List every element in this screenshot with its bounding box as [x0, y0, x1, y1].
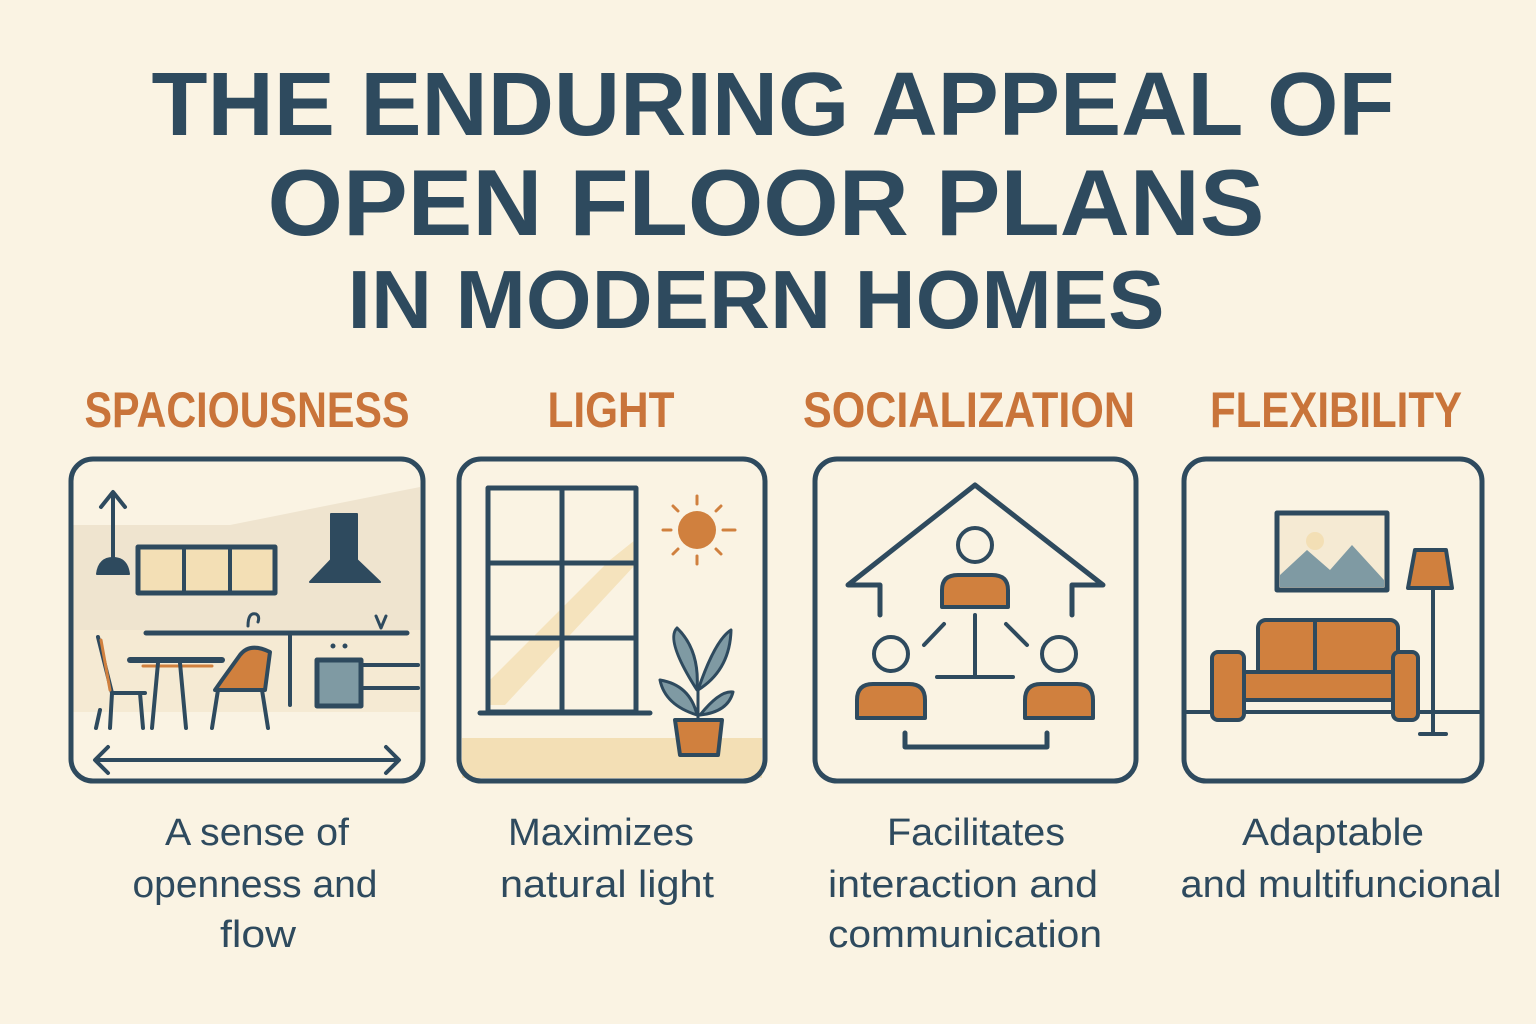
panel: socialization [815, 459, 1136, 781]
headings: LIGHT [548, 382, 674, 438]
captions: and multifuncional [1180, 864, 1502, 906]
title: IN MODERN HOMES [348, 253, 1164, 346]
title [152, 55, 1394, 346]
captions: Maximizes [508, 812, 694, 854]
captions: openness and [132, 864, 378, 906]
captions [132, 812, 1502, 956]
panel: light [459, 459, 765, 781]
headings: SOCIALIZATION [803, 382, 1135, 438]
headings: FLEXIBILITY [1210, 382, 1462, 438]
title: THE ENDURING APPEAL OF [152, 55, 1394, 155]
headings [84, 382, 1462, 438]
captions: flow [220, 914, 297, 956]
panel: flexibility [1184, 459, 1482, 781]
captions: natural light [500, 864, 714, 906]
title: OPEN FLOOR PLANS [268, 150, 1264, 255]
captions: A sense of [165, 812, 349, 854]
headings: SPACIOUSNESS [84, 382, 410, 438]
captions: interaction and [828, 864, 1098, 906]
panel: spaciousness [71, 459, 423, 781]
captions: Adaptable [1242, 812, 1424, 854]
captions: communication [828, 914, 1102, 956]
captions: Facilitates [887, 812, 1065, 854]
